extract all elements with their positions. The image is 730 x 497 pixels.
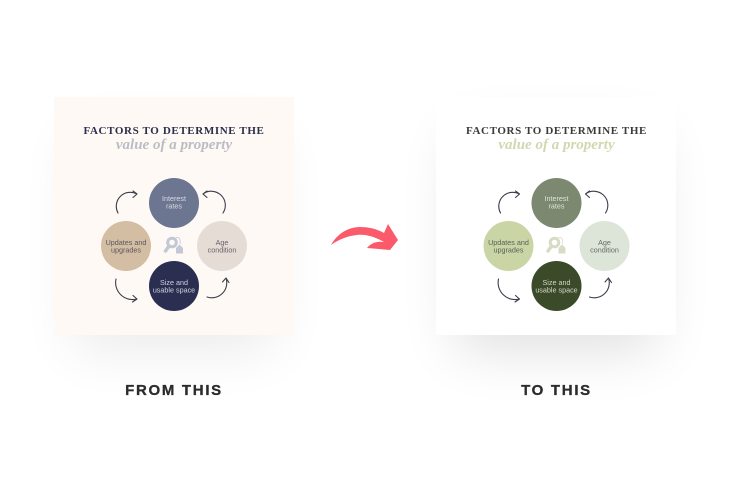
panel: from this (54, 97, 294, 335)
circle: age condition: Age (216, 238, 228, 247)
circle: updates and upgrades: upgrades (494, 246, 524, 254)
panel: to this (436, 97, 676, 335)
circle: updates and upgrades (101, 221, 151, 271)
circle: size and usable space (532, 261, 582, 311)
panel shadow: right (456, 135, 656, 350)
circle: interest rates: Interest (545, 194, 568, 203)
circle: age condition: condition (590, 246, 619, 254)
circle: updates and upgrades (484, 221, 534, 271)
circle: interest rates: Interest (162, 194, 186, 203)
circle: size and usable space: usable space (153, 286, 195, 294)
circle: updates and upgrades: Updates and (106, 238, 146, 247)
circle: size and usable space: usable space (535, 286, 578, 294)
circle: interest rates (149, 178, 199, 228)
circle: interest rates: rates (166, 202, 182, 210)
subheading: value of a property: value of a property (498, 137, 615, 153)
circle: age condition (580, 221, 630, 271)
circle: updates and upgrades: Updates and (488, 238, 529, 247)
circle: size and usable space: Size and (160, 278, 188, 287)
panel shadow: left (74, 135, 274, 350)
arrow: from to to (331, 224, 398, 250)
cycle arrows (498, 191, 612, 302)
circle: size and usable space (149, 261, 199, 311)
subheading: value of a property: value of a property (116, 137, 232, 153)
caption: to this: TO THIS (521, 382, 592, 399)
heading: factors: FACTORS TO DETERMINE THE (466, 125, 647, 137)
circle: updates and upgrades: upgrades (111, 246, 141, 254)
circle: age condition: Age (598, 238, 611, 247)
circle: age condition: condition (208, 246, 236, 254)
circle: interest rates (532, 178, 582, 228)
heading: factors: FACTORS TO DETERMINE THE (83, 125, 265, 137)
circle: interest rates: rates (549, 202, 565, 210)
icon: key and house tag (166, 237, 183, 254)
circle: age condition (197, 221, 247, 271)
cycle arrows (116, 191, 229, 302)
circle: size and usable space: Size and (543, 278, 570, 287)
caption: from this: FROM THIS (125, 382, 223, 399)
icon: key and house tag (548, 237, 566, 254)
